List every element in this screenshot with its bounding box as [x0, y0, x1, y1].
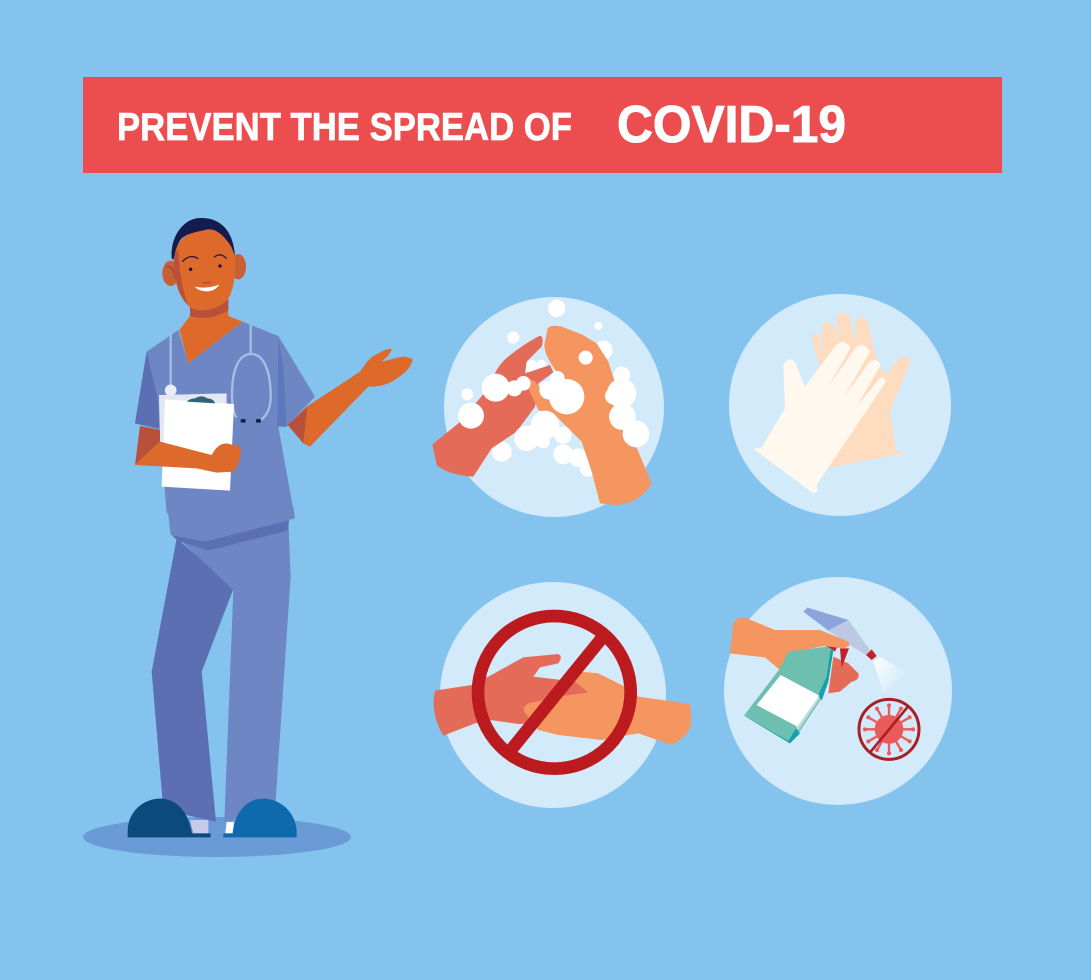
arm: pointing: [288, 349, 413, 447]
hand behind bottle: [828, 657, 859, 693]
legs and shoes: [128, 507, 297, 837]
hand: light: [524, 671, 691, 745]
stethoscope: [166, 325, 271, 423]
heading: prevent the spread of: PREVENT THE SPREAD OF: [117, 106, 572, 149]
doctor figure: [83, 218, 413, 857]
neck: [179, 293, 243, 363]
hand on bottle: [730, 617, 849, 670]
panel: wash hands: [432, 297, 664, 517]
panel: no handshake: [434, 582, 691, 808]
bottle: [744, 647, 833, 743]
face: [174, 228, 235, 310]
title banner: [83, 77, 1002, 173]
ears: [162, 261, 179, 286]
ground shadow: [83, 817, 351, 857]
glove: front: [753, 342, 886, 493]
facial features: [182, 255, 227, 291]
clipboard: [159, 393, 234, 491]
shirt: [135, 322, 315, 513]
hand: light: [525, 326, 652, 505]
upper body and head: [135, 218, 413, 513]
soap bubbles behind: [461, 300, 630, 477]
spray head: [803, 608, 877, 668]
glove: back: [812, 313, 910, 468]
heading: COVID-19: COVID-19: [617, 96, 846, 154]
icon: crossed-out virus: [859, 699, 919, 759]
hand: dark: [432, 336, 553, 477]
panel: wear gloves: [729, 294, 951, 516]
hair: [172, 218, 235, 260]
prohibition sign: [478, 616, 631, 769]
soap bubbles front: [458, 351, 649, 451]
hand: dark: [434, 654, 588, 736]
panel: disinfect spray: [724, 577, 952, 805]
arm: holding clipboard: [135, 426, 241, 473]
spray mist: [873, 657, 907, 692]
